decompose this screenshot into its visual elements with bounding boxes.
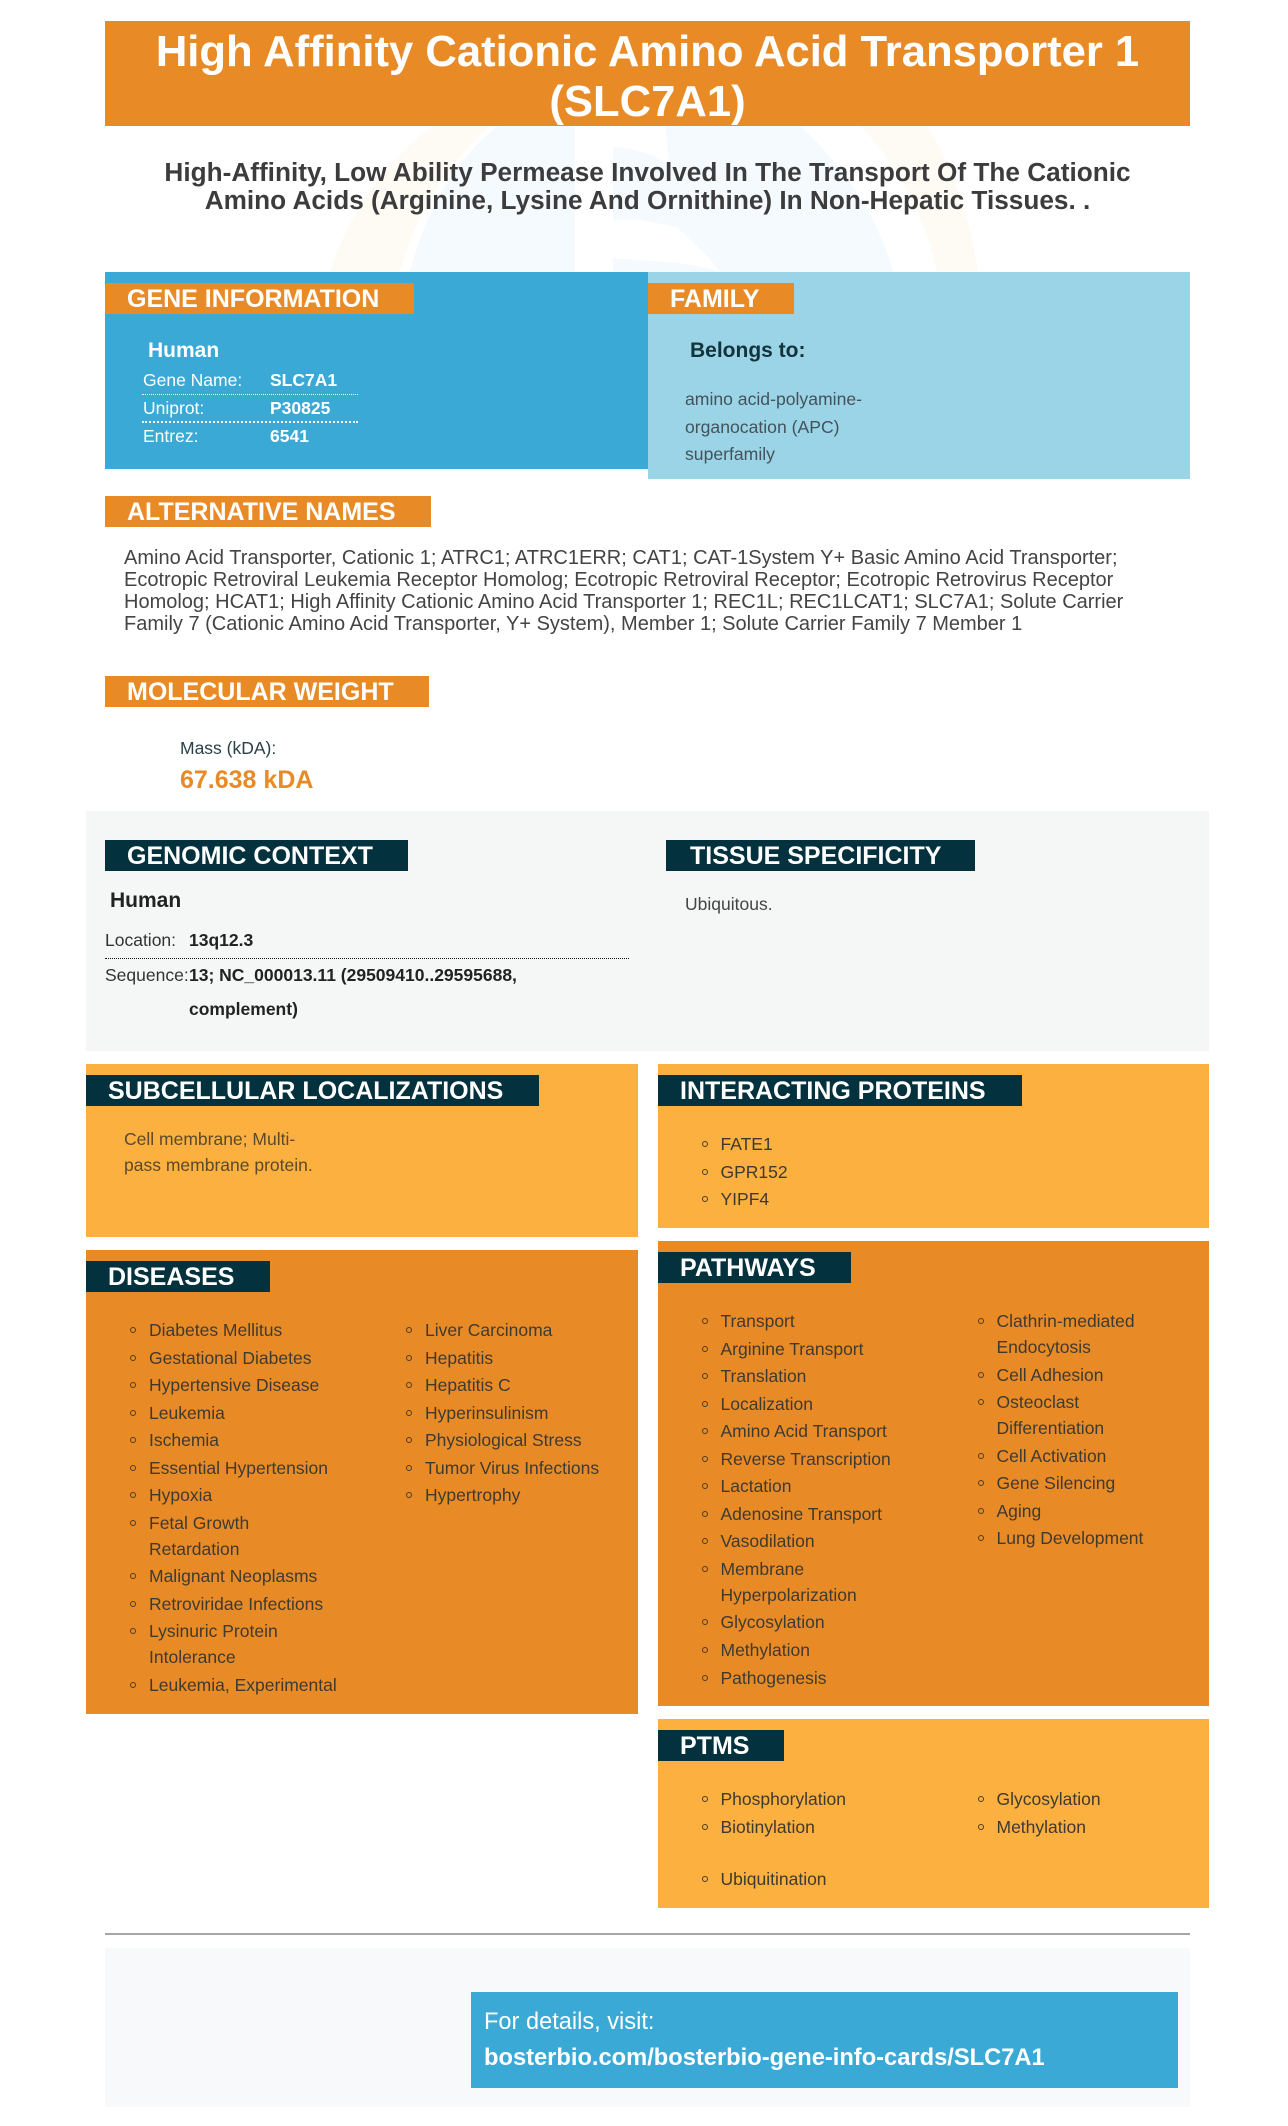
alternative names text: Amino Acid Transporter, Cationic 1; ATRC1; ATRC1ERR; CAT1; CAT-1System Y+ Basic Amino Acid Transporter; (124, 547, 1118, 569)
pathway list column 1: Lactation (720, 1476, 792, 1496)
pathway list column 1: Translation (720, 1366, 806, 1386)
pathway list column 2: Cell Adhesion (996, 1365, 1104, 1385)
pathway list column 2: Osteoclast (996, 1392, 1079, 1412)
disease list column 1: Retardation (149, 1539, 239, 1559)
disease list column 1: Leukemia, Experimental (149, 1675, 337, 1695)
disease list column 1: Retroviridae Infections (149, 1594, 323, 1614)
heading: ptms (658, 1730, 784, 1761)
panel: interacting proteins (658, 1064, 1209, 1228)
entrez row: Entrez: (143, 426, 198, 446)
pathway list column 1: Glycosylation (720, 1612, 825, 1632)
disease list column 2: Liver Carcinoma (425, 1320, 552, 1340)
disease list column 1: Fetal Growth (149, 1513, 249, 1533)
background watermark logo (330, 126, 978, 272)
family text: superfamily (685, 444, 775, 464)
pathway list column 1: Amino Acid Transport (720, 1421, 887, 1441)
heading: alternative names: ALTERNATIVE NAMES (127, 498, 396, 526)
disease list column 1: Diabetes Mellitus (149, 1320, 282, 1340)
pathway list column 2 (978, 1311, 1144, 1548)
localization text: Cell membrane; Multi- (124, 1129, 295, 1149)
uniprot row: P30825 (270, 398, 330, 418)
location row (105, 930, 253, 950)
pathway list column 2: Clathrin-mediated (996, 1311, 1135, 1331)
callout: details link (471, 1992, 1178, 2088)
subtitle: High-Affinity, Low Ability Permease Involved In The Transport Of The Cationic (164, 157, 1131, 187)
family text: organocation (APC) (685, 416, 840, 436)
disease list column 1: Ischemia (149, 1430, 219, 1450)
disease list column 2 (406, 1320, 599, 1505)
heading: pathways: PATHWAYS (680, 1254, 816, 1282)
disease list column 1: Lysinuric Protein (149, 1621, 278, 1641)
pathway list column 2: Gene Silencing (996, 1473, 1115, 1493)
heading: pathways (658, 1252, 851, 1283)
pathway list column 1: Adenosine Transport (720, 1504, 882, 1524)
disease list column 2: Hepatitis C (425, 1375, 511, 1395)
ptm list third item: Ubiquitination (720, 1869, 827, 1889)
alternative names text: Family 7 (Cationic Amino Acid Transporter, Y+ System), Member 1; Solute Carrier Family 7 Member 1 (124, 613, 1022, 635)
species label: Human (110, 889, 181, 912)
protein list: GPR152 (720, 1162, 788, 1182)
family text: amino acid-polyamine- (685, 389, 862, 409)
location row: 13q12.3 (189, 930, 253, 950)
pathway list column 1: Transport (720, 1311, 795, 1331)
alternative names text (124, 547, 1123, 635)
disease list column 1: Essential Hypertension (149, 1458, 328, 1478)
pathway list column 2: Aging (996, 1501, 1041, 1521)
ptm list column 2: Glycosylation (996, 1789, 1101, 1809)
localization text (124, 1129, 313, 1175)
protein list (702, 1134, 788, 1209)
heading: genomic context: GENOMIC CONTEXT (127, 842, 373, 870)
ptm list column 1 (702, 1789, 846, 1837)
location row: Location: (105, 930, 176, 950)
disease list column 2: Hypertrophy (425, 1485, 520, 1505)
uniprot row: Uniprot: (143, 398, 204, 418)
panel: diseases (86, 1250, 638, 1714)
title banner: High Affinity Cationic Amino Acid Transporter 1 (156, 28, 1139, 76)
ptm list column 2 (978, 1789, 1101, 1837)
panel: ptms (658, 1719, 1209, 1908)
pathway list column 1: Hyperpolarization (720, 1585, 857, 1605)
sequence row (105, 965, 517, 1019)
disease list column 2: Physiological Stress (425, 1430, 582, 1450)
disease list column 2: Tumor Virus Infections (425, 1458, 599, 1478)
details label: For details, visit: (484, 2009, 654, 2035)
disease list column 1: Hypertensive Disease (149, 1375, 319, 1395)
heading: family: FAMILY (670, 285, 759, 313)
ptm list column 1: Biotinylation (720, 1817, 815, 1837)
pathway list column 1: Pathogenesis (720, 1668, 827, 1688)
entrez row (143, 426, 309, 446)
uniprot row (143, 398, 330, 418)
ptm list column 2: Methylation (996, 1817, 1086, 1837)
disease list column 1: Hypoxia (149, 1485, 212, 1505)
pathway list column 2: Differentiation (996, 1418, 1104, 1438)
heading: molecular weight: MOLECULAR WEIGHT (127, 678, 394, 706)
belongs to label: Belongs to: (690, 339, 806, 362)
protein list: FATE1 (720, 1134, 773, 1154)
ptm list column 1: Phosphorylation (720, 1789, 846, 1809)
title banner (105, 21, 1190, 126)
title banner: (SLC7A1) (549, 78, 746, 126)
panel: pathways (658, 1241, 1209, 1706)
alternative names text: Ecotropic Retroviral Leukemia Receptor Homolog; Ecotropic Retroviral Receptor; Ecotropic Retrovirus Receptor (124, 569, 1113, 591)
sequence row: complement) (189, 999, 298, 1019)
disease list column 1: Malignant Neoplasms (149, 1566, 317, 1586)
disease list column 1: Intolerance (149, 1647, 236, 1667)
localization text: pass membrane protein. (124, 1155, 313, 1175)
disease list column 1: Gestational Diabetes (149, 1348, 311, 1368)
panel: footer (105, 1948, 1190, 2107)
disease list column 2: Hyperinsulinism (425, 1403, 549, 1423)
pathway list column 1 (702, 1311, 891, 1688)
pathway list column 2: Cell Activation (996, 1446, 1106, 1466)
mass value: 67.638 kDA (180, 766, 313, 794)
disease list column 1 (130, 1320, 337, 1695)
subtitle (164, 157, 1131, 215)
heading: tissue specificity: TISSUE SPECIFICITY (690, 842, 941, 870)
subtitle: Amino Acids (Arginine, Lysine And Ornithine) In Non-Hepatic Tissues. . (205, 185, 1090, 215)
alternative names text: Homolog; HCAT1; High Affinity Cationic Amino Acid Transporter 1; REC1L; REC1LCAT1; SLC7A1; Solute Carrier (124, 591, 1123, 613)
gene name row (143, 370, 337, 390)
species label: Human (148, 339, 219, 362)
pathway list column 1: Vasodilation (720, 1531, 815, 1551)
details url: bosterbio.com/bosterbio-gene-info-cards/SLC7A1 (484, 2045, 1045, 2071)
panel: subcellular localizations (86, 1064, 638, 1237)
gene name row: SLC7A1 (270, 370, 337, 390)
sequence row: Sequence: (105, 965, 189, 985)
pathway list column 1: Membrane (720, 1559, 804, 1579)
protein list: YIPF4 (720, 1189, 769, 1209)
pathway list column 2: Lung Development (996, 1528, 1143, 1548)
pathway list column 1: Methylation (720, 1640, 810, 1660)
heading: diseases (86, 1261, 270, 1292)
pathway list column 2: Endocytosis (996, 1337, 1091, 1357)
heading: ptms: PTMS (680, 1732, 749, 1760)
heading: family (648, 283, 794, 314)
mass label: Mass (kDA): (180, 738, 276, 758)
sequence row: 13; NC_000013.11 (29509410..29595688, (189, 965, 517, 985)
panel: family (648, 272, 1190, 479)
disease list column 2: Hepatitis (425, 1348, 493, 1368)
disease list column 1: Leukemia (149, 1403, 225, 1423)
panel: genomic context and tissue specificity (86, 811, 1209, 1051)
gene name row: Gene Name: (143, 370, 242, 390)
panel: gene information (105, 272, 648, 469)
heading: gene information: GENE INFORMATION (127, 285, 379, 313)
heading: subcellular localizations: SUBCELLULAR LOCALIZATIONS (108, 1077, 503, 1105)
heading: interacting proteins: INTERACTING PROTEINS (680, 1077, 986, 1105)
molecular weight value (180, 738, 313, 794)
pathway list column 1: Arginine Transport (720, 1339, 864, 1359)
heading: diseases: DISEASES (108, 1263, 234, 1291)
tissue text: Ubiquitous. (685, 894, 773, 914)
pathway list column 1: Reverse Transcription (720, 1449, 891, 1469)
family text (685, 389, 862, 464)
pathway list column 1: Localization (720, 1394, 813, 1414)
entrez row: 6541 (270, 426, 309, 446)
